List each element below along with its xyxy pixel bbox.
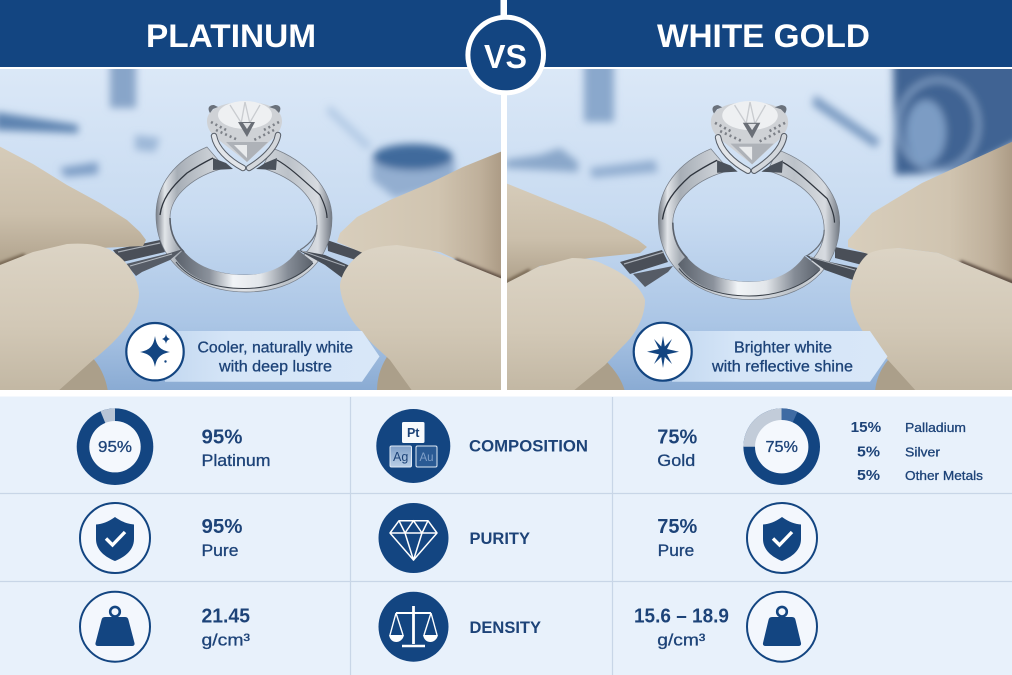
icon: periodic element tiles: Pt [407, 426, 420, 440]
platinum composition value [202, 426, 270, 470]
tweezers, front [805, 255, 858, 280]
white gold donut chart 75% [743, 408, 820, 485]
VS badge [468, 17, 544, 93]
blurred workshop tools, right [505, 60, 1012, 178]
crease shadows [0, 255, 25, 266]
white gold composition value [657, 426, 698, 470]
heading: white gold: WHITE GOLD [657, 18, 870, 54]
alloy legend [851, 419, 984, 484]
fingers [503, 140, 1012, 392]
row: density [80, 592, 817, 662]
platinum density value [202, 606, 250, 650]
alloy legend: 5% [857, 444, 880, 460]
platinum density value: g/cm³ [202, 631, 250, 650]
icon: eight-point star [634, 323, 692, 381]
alloy legend: Palladium [905, 420, 966, 435]
crease shadows [503, 270, 530, 284]
header bar: white gold [507, 0, 1012, 67]
platinum donut chart 95% [77, 408, 153, 485]
header bar: platinum [0, 0, 500, 67]
white gold donut chart 75%: 75% [766, 439, 798, 456]
icon: shield check, platinum [80, 503, 150, 573]
white gold composition value: 75% [657, 426, 698, 448]
icon: periodic element tiles: Ag [393, 450, 408, 464]
small fingers [50, 355, 108, 392]
thumb left [503, 258, 645, 392]
row label: composition: COMPOSITION [469, 437, 588, 456]
white gold purity value: Pure [658, 541, 694, 560]
comparison table panel [0, 396, 1012, 675]
callout text [711, 340, 853, 376]
callout text: with deep lustre [218, 359, 332, 376]
platinum composition value: Platinum [202, 451, 270, 470]
icon: periodic element tiles: Au [419, 452, 434, 464]
callout text: Brighter white [734, 340, 832, 357]
alloy legend: 15% [851, 419, 881, 436]
thumb right [850, 248, 1012, 392]
callout banner [672, 331, 888, 382]
white gold purity value [657, 516, 698, 560]
tweezers, front [126, 249, 183, 276]
icon: weight, platinum [80, 592, 150, 662]
photo: platinum ring held by fingers [0, 60, 505, 392]
thumb right [340, 245, 505, 392]
alloy legend: Silver [905, 444, 941, 460]
platinum purity value: Pure [202, 541, 238, 560]
platinum donut chart 95%: 95% [98, 439, 132, 456]
VS badge: VS [484, 38, 527, 75]
fingers [0, 144, 505, 392]
white gold composition value: Gold [657, 451, 695, 470]
callout text: with reflective shine [711, 359, 853, 376]
callout banner [165, 331, 380, 382]
white gold density value: g/cm³ [657, 631, 706, 650]
tweezers, back [620, 250, 668, 274]
row: composition [77, 408, 984, 485]
callout: brighter white [634, 323, 888, 382]
white gold purity value: 75% [657, 516, 698, 538]
callout: cooler, naturally white [126, 323, 380, 382]
alloy legend: Other Metals [905, 468, 984, 483]
white gold density value [634, 606, 729, 650]
icon: four-point sparkle [126, 323, 184, 380]
platinum purity value [202, 516, 243, 560]
tweezers, back [113, 240, 165, 262]
platinum purity value: 95% [202, 516, 243, 538]
icon: diamond [378, 503, 448, 573]
icon: shield check, white gold [747, 503, 817, 573]
heading: platinum: PLATINUM [146, 18, 316, 54]
thumb left [0, 244, 139, 392]
icon: balance scale [378, 592, 448, 662]
platinum composition value: 95% [202, 426, 243, 448]
blurred workshop tools, left [0, 60, 455, 198]
icon: weight, white gold [747, 592, 817, 662]
alloy legend: 5% [857, 467, 880, 484]
row: purity [80, 503, 817, 573]
row label: purity: PURITY [470, 529, 531, 548]
white gold density value: 15.6 – 18.9 [634, 606, 729, 628]
icon: periodic element tiles [376, 409, 450, 483]
row label: density: DENSITY [470, 618, 542, 637]
small fingers [565, 360, 625, 392]
photo: white gold ring held by fingers [503, 60, 1012, 392]
platinum density value: 21.45 [202, 606, 250, 628]
callout text: Cooler, naturally white [198, 340, 353, 357]
callout text [198, 340, 353, 376]
